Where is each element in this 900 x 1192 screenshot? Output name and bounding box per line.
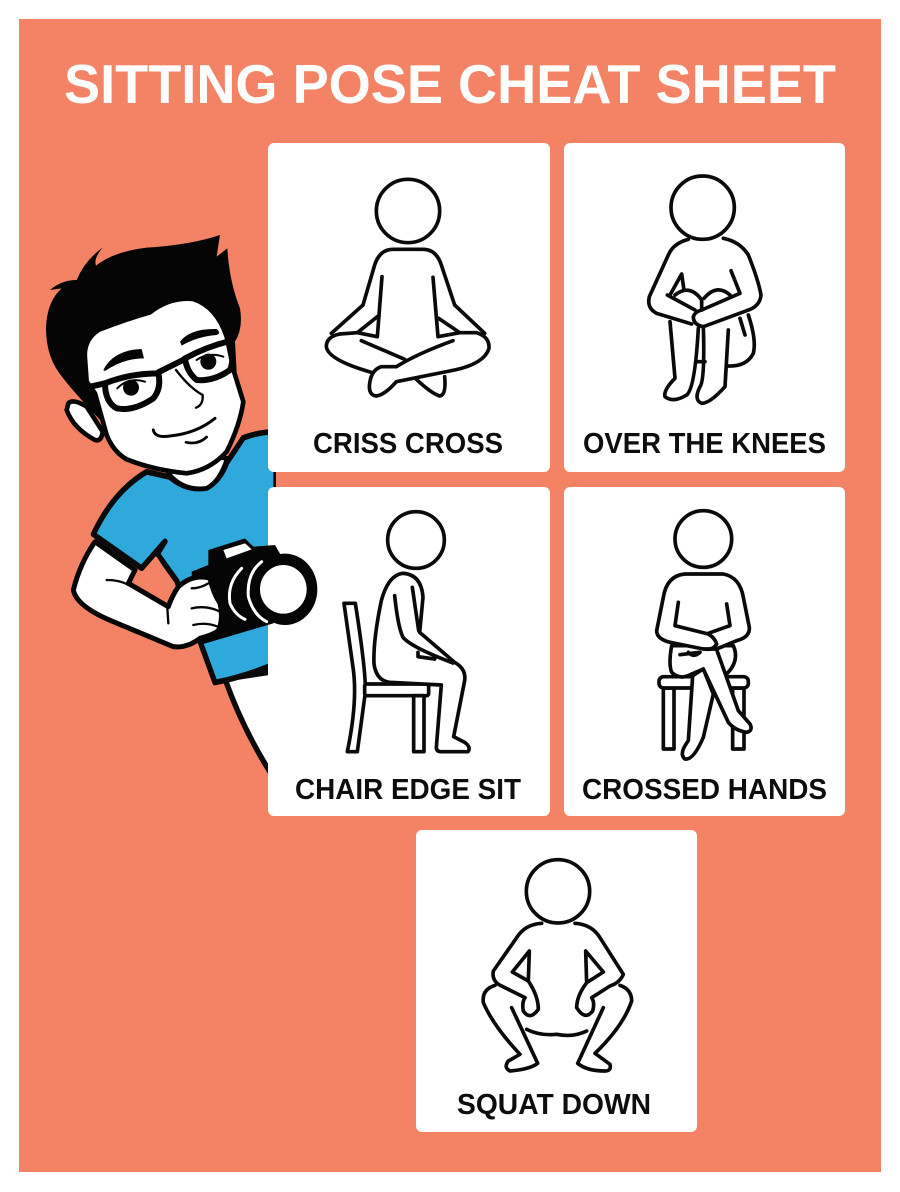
neck — [168, 455, 227, 489]
card: over the knees — [564, 143, 845, 472]
man: torso behind the cards — [93, 424, 289, 777]
smile — [153, 418, 215, 437]
eyebrows — [103, 349, 144, 371]
man: camera and arm in front of the cards — [73, 538, 317, 647]
nose — [176, 370, 203, 408]
title: SITTING POSE CHEAT SHEET — [64, 53, 836, 115]
face — [85, 299, 243, 473]
label: SQUAT DOWN — [457, 1089, 651, 1121]
hair — [46, 235, 241, 422]
gap between arm and shirt — [132, 557, 177, 610]
cover beyond notch — [276, 424, 289, 681]
camera — [192, 538, 317, 644]
ear — [67, 401, 103, 440]
card: chair edge sit — [268, 487, 550, 816]
glasses — [87, 341, 232, 409]
card: crossed hands — [564, 487, 845, 816]
figure: crossed hands pose — [657, 511, 751, 759]
label: CHAIR EDGE SIT — [295, 774, 521, 806]
label: OVER THE KNEES — [583, 428, 826, 460]
t-shirt — [93, 431, 276, 682]
figure: squat down pose — [483, 860, 632, 1071]
card: squat down — [416, 830, 697, 1132]
figure: criss cross pose — [326, 179, 489, 396]
card: criss cross — [268, 143, 550, 472]
eyes — [117, 354, 223, 396]
figure: over the knees pose — [649, 176, 761, 403]
label: CROSSED HANDS — [582, 774, 827, 806]
trousers — [225, 670, 283, 777]
arm and hand — [73, 542, 222, 647]
label: CRISS CROSS — [313, 428, 503, 460]
man: head — [46, 235, 243, 489]
figure: chair edge sit pose — [344, 512, 469, 752]
